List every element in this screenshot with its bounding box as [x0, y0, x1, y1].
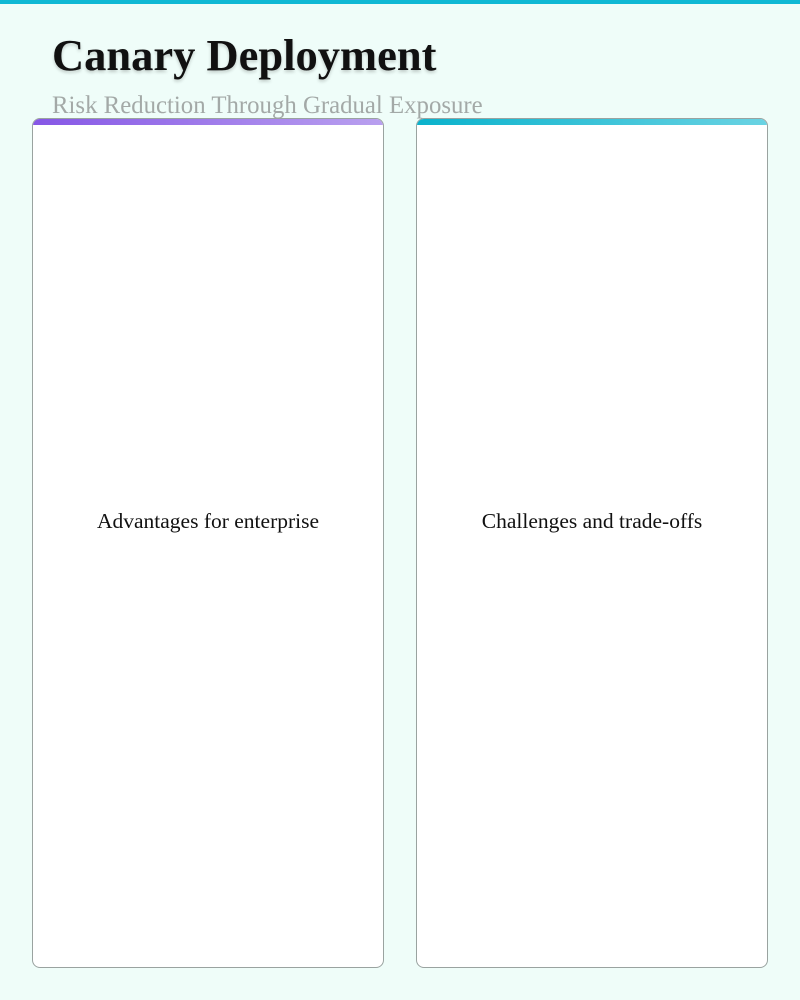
panel: challenges [416, 118, 768, 968]
panel label: challenges: Challenges and trade-offs [482, 509, 702, 533]
panel label: advantages: Advantages for enterprise [97, 509, 319, 533]
subtitle: Risk Reduction Through Gradual Exposure [52, 92, 483, 119]
title: Canary Deployment [52, 30, 436, 80]
panel: advantages [32, 118, 384, 968]
